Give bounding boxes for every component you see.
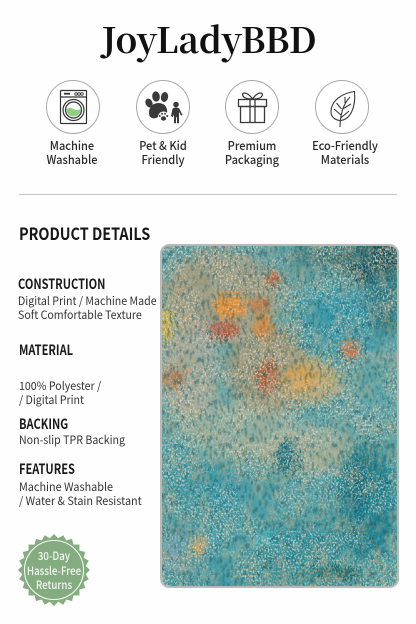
text: badge label [27,548,81,593]
divider [19,194,397,195]
heading: material: MATERIAL [19,340,73,360]
section: features [19,459,142,509]
section: material [19,340,101,408]
label: eco-friendly [312,137,378,168]
heading: product details: PRODUCT DETAILS [19,220,150,245]
title: JoyLadyBBD [102,14,316,64]
heading: features: FEATURES [19,459,75,479]
text: material details [19,378,101,408]
label: machine washable: Washable [46,150,98,168]
text: material details: / Digital Print [19,392,84,408]
label: pet and kid: Pet & Kid [139,137,187,154]
section: backing [19,414,125,448]
label: premium packaging: Packaging [225,150,279,168]
text: construction details: Digital Print / Machine Made [18,293,157,309]
text: badge label: Hassle-Free [27,562,81,578]
text: material details: 100% Polyester / [19,378,101,394]
label: machine washable: Machine [50,137,94,154]
label: pet and kid: Friendly [141,150,185,168]
icon: pet and kid [136,80,190,134]
text: features details: / Water & Stain Resistant [19,493,142,509]
text: badge label: Returns [36,577,72,593]
icon: gift box [225,80,279,134]
text: construction details [18,293,157,323]
text: backing details: Non-slip TPR Backing [19,432,125,448]
icon: machine washable [46,80,100,134]
text: features details [19,479,142,509]
label: premium packaging: Premium [228,137,276,154]
rug image [160,244,399,588]
text: badge label: 30-Day [38,548,70,564]
heading: backing: BACKING [19,414,68,434]
text: construction details: Soft Comfortable Texture [18,307,142,323]
icon: leaf [315,80,369,134]
label: eco-friendly: Materials [321,150,369,168]
label: machine washable [46,137,98,168]
section: construction [18,274,157,323]
label: pet and kid [139,137,187,168]
label: eco-friendly: Eco-Friendly [312,137,378,154]
text: features details: Machine Washable [19,479,113,495]
label: premium packaging [225,137,279,168]
heading: construction: CONSTRUCTION [18,274,105,294]
badge: 30-day returns [18,534,90,606]
